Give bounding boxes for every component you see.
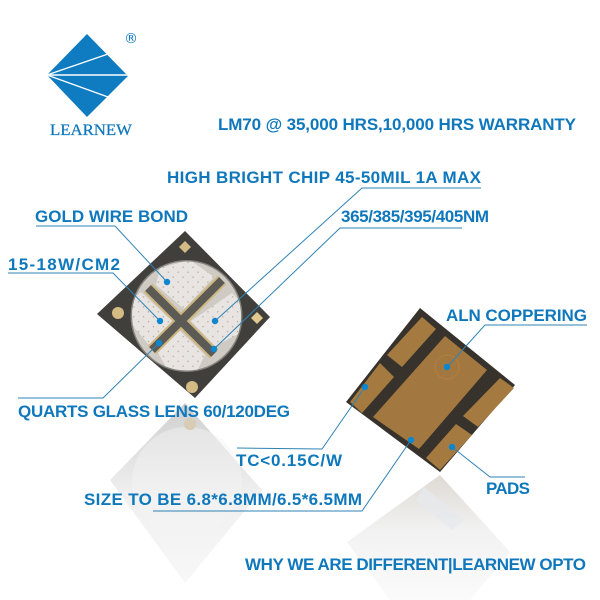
pads	[350, 317, 514, 470]
reflection: back chip	[347, 475, 510, 600]
substrate	[346, 308, 515, 472]
label: gold wire: GOLD WIRE BOND	[35, 207, 188, 226]
label: wavelength: 365/385/395/405NM	[341, 207, 489, 226]
chip quadrants	[131, 260, 246, 371]
callout lines	[8, 188, 587, 511]
icon: blue diamond	[47, 34, 128, 117]
label: pads: PADS	[486, 479, 530, 498]
heading: warranty: LM70 @ 35,000 HRS,10,000 HRS WARRANTY	[218, 115, 577, 134]
label: copper: ALN COPPERING	[446, 306, 587, 325]
footer tagline: WHY WE ARE DIFFERENT|LEARNEW OPTO	[245, 555, 586, 574]
chip body	[97, 231, 270, 398]
label: chip: HIGH BRIGHT CHIP 45-50MIL 1A MAX	[167, 168, 482, 187]
label: lens: QUARTS GLASS LENS 60/120DEG	[18, 402, 290, 421]
reflection: front chip	[110, 403, 262, 583]
contact pads	[112, 241, 263, 393]
label: power density: 15-18W/CM2	[8, 255, 120, 274]
dark cross	[148, 280, 222, 354]
label: thermal: TC<0.15C/W	[236, 451, 343, 470]
icon: white rays	[47, 54, 128, 97]
large copper area	[373, 336, 487, 449]
label: size: SIZE TO BE 6.8*6.8MM/6.5*6.5MM	[84, 490, 362, 509]
back chip	[346, 308, 515, 472]
copper ring	[435, 355, 459, 379]
gold frame of cross	[148, 280, 222, 354]
brand name: LEARNEW	[50, 122, 133, 139]
front chip	[97, 231, 270, 398]
quartz lens	[130, 260, 242, 372]
logo	[47, 31, 138, 139]
registered mark: ®	[124, 31, 138, 47]
callout dots	[156, 279, 455, 450]
